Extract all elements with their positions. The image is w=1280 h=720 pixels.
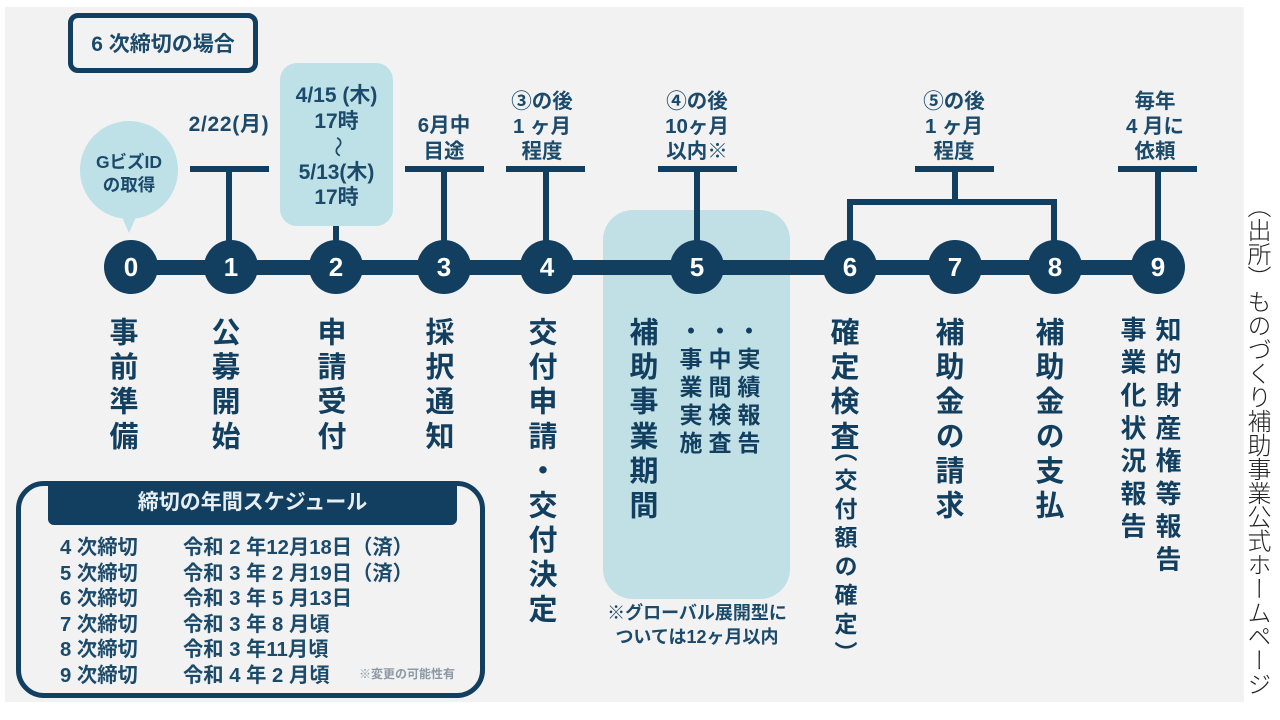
callout: step 0 GビズID — [80, 121, 178, 233]
schedule rows: 令和 3 年11月頃 — [183, 639, 328, 661]
step label 4: 交付申請・交付決定 — [524, 317, 556, 628]
step label 0: 事前準備 — [105, 317, 137, 455]
step marker 7 — [928, 240, 982, 294]
panel: step 2 dates — [280, 63, 393, 226]
step marker 2 — [309, 240, 363, 294]
schedule rows: 9 次締切 — [60, 664, 138, 686]
step marker 6 — [823, 240, 877, 294]
step marker 7: 7 — [948, 252, 962, 282]
step marker 0 — [104, 240, 158, 294]
date label: step 5: ④の後 10ヶ月 以内※ — [665, 90, 729, 163]
step marker 0: 0 — [124, 252, 138, 282]
step label 7: 補助金の請求 — [931, 317, 963, 525]
schedule rows: 令和 3 年 5 月13日 — [183, 588, 352, 610]
step marker 2: 2 — [329, 252, 343, 282]
panel heading — [48, 481, 457, 525]
step label 5: 補助事業期間 — [625, 317, 657, 525]
detail: 中間検査: ・中間検査 — [705, 319, 731, 459]
schedule rows: 令和 3 年 8 月頃 — [183, 614, 330, 636]
step label 8: 補助金の支払 — [1031, 317, 1063, 525]
timeline: connecting line — [130, 260, 1158, 275]
line: 知的財産権等報告: 知的財産権等報告 — [1152, 316, 1182, 578]
step label 6 — [826, 317, 860, 669]
heading: 6次締切の場合 — [68, 13, 258, 73]
schedule rows — [60, 536, 413, 686]
step marker 4: 4 — [540, 252, 554, 282]
step marker 9 — [1131, 240, 1185, 294]
schedule rows: 令和 4 年 2 月頃 — [183, 664, 330, 686]
step marker 5: 5 — [690, 252, 704, 282]
detail: 実績報告: ・実績報告 — [734, 319, 760, 459]
panel: step 2 dates: 4/15 (木) 17時 5/13(木) 17時 — [296, 84, 377, 209]
step marker 5 — [670, 240, 724, 294]
callout: step 0 GビズID: GビズID の取得 — [96, 152, 162, 195]
panel: annual deadline schedule — [16, 481, 485, 698]
stems and date brackets — [190, 166, 1197, 240]
timeline: step 5 line over panel — [603, 260, 790, 275]
step marker 6: 6 — [843, 252, 857, 282]
date label: steps 6 to 8: ⑤の後 1 ヶ月 程度 — [923, 90, 985, 163]
step marker 9: 9 — [1151, 252, 1165, 282]
step label 2: 申請受付 — [313, 317, 345, 455]
date label: step 9: 毎年 4 月に 依頼 — [1126, 90, 1184, 163]
step label 3: 採択通知 — [421, 317, 453, 455]
schedule rows: 4 次締切 — [60, 537, 138, 559]
schedule rows: 6 次締切 — [60, 588, 138, 610]
step marker 3: 3 — [437, 252, 451, 282]
heading: 6次締切の場合: 6 次締切の場合 — [91, 33, 235, 56]
step marker 8 — [1028, 240, 1082, 294]
schedule note: ※変更の可能性有 — [359, 667, 455, 681]
step 5 note: ※グローバル展開型に ついては12ヶ月以内 — [607, 603, 787, 647]
source note: （出所）ものづくり補助事業公式ホームページ — [1242, 194, 1277, 696]
schedule rows: 8 次締切 — [60, 639, 138, 661]
panel heading: 締切の年間スケジュール — [138, 491, 367, 514]
step 5 details — [676, 319, 760, 459]
schedule rows: 令和 2 年12月18日（済） — [183, 537, 413, 559]
sub label: 交付額の確定: （交付額の確定） — [831, 439, 857, 669]
date label: step 3: 6月中 目途 — [418, 114, 470, 162]
step label 6: 確定検査 — [826, 317, 858, 455]
schedule rows: 5 次締切 — [60, 562, 138, 584]
step marker 8: 8 — [1048, 252, 1062, 282]
line: 事業化状況報告: 事業化状況報告 — [1117, 316, 1147, 546]
date label: step 4: ③の後 1 ヶ月 程度 — [511, 90, 573, 163]
schedule rows: 令和 3 年 2 月19日（済） — [183, 562, 413, 584]
schedule rows: 7 次締切 — [60, 614, 138, 636]
panel: step 2 dates: 〜 — [325, 136, 348, 157]
step marker 3 — [417, 240, 471, 294]
step marker 1 — [204, 240, 258, 294]
step marker 4 — [520, 240, 574, 294]
detail: 事業実施: ・事業実施 — [676, 319, 702, 459]
step label 9 — [1117, 316, 1182, 578]
step label 1: 公募開始 — [207, 317, 239, 455]
step marker 1: 1 — [224, 252, 238, 282]
date label: step 1: 2/22(月) — [189, 113, 269, 136]
panel: step 5 period background — [603, 210, 790, 599]
